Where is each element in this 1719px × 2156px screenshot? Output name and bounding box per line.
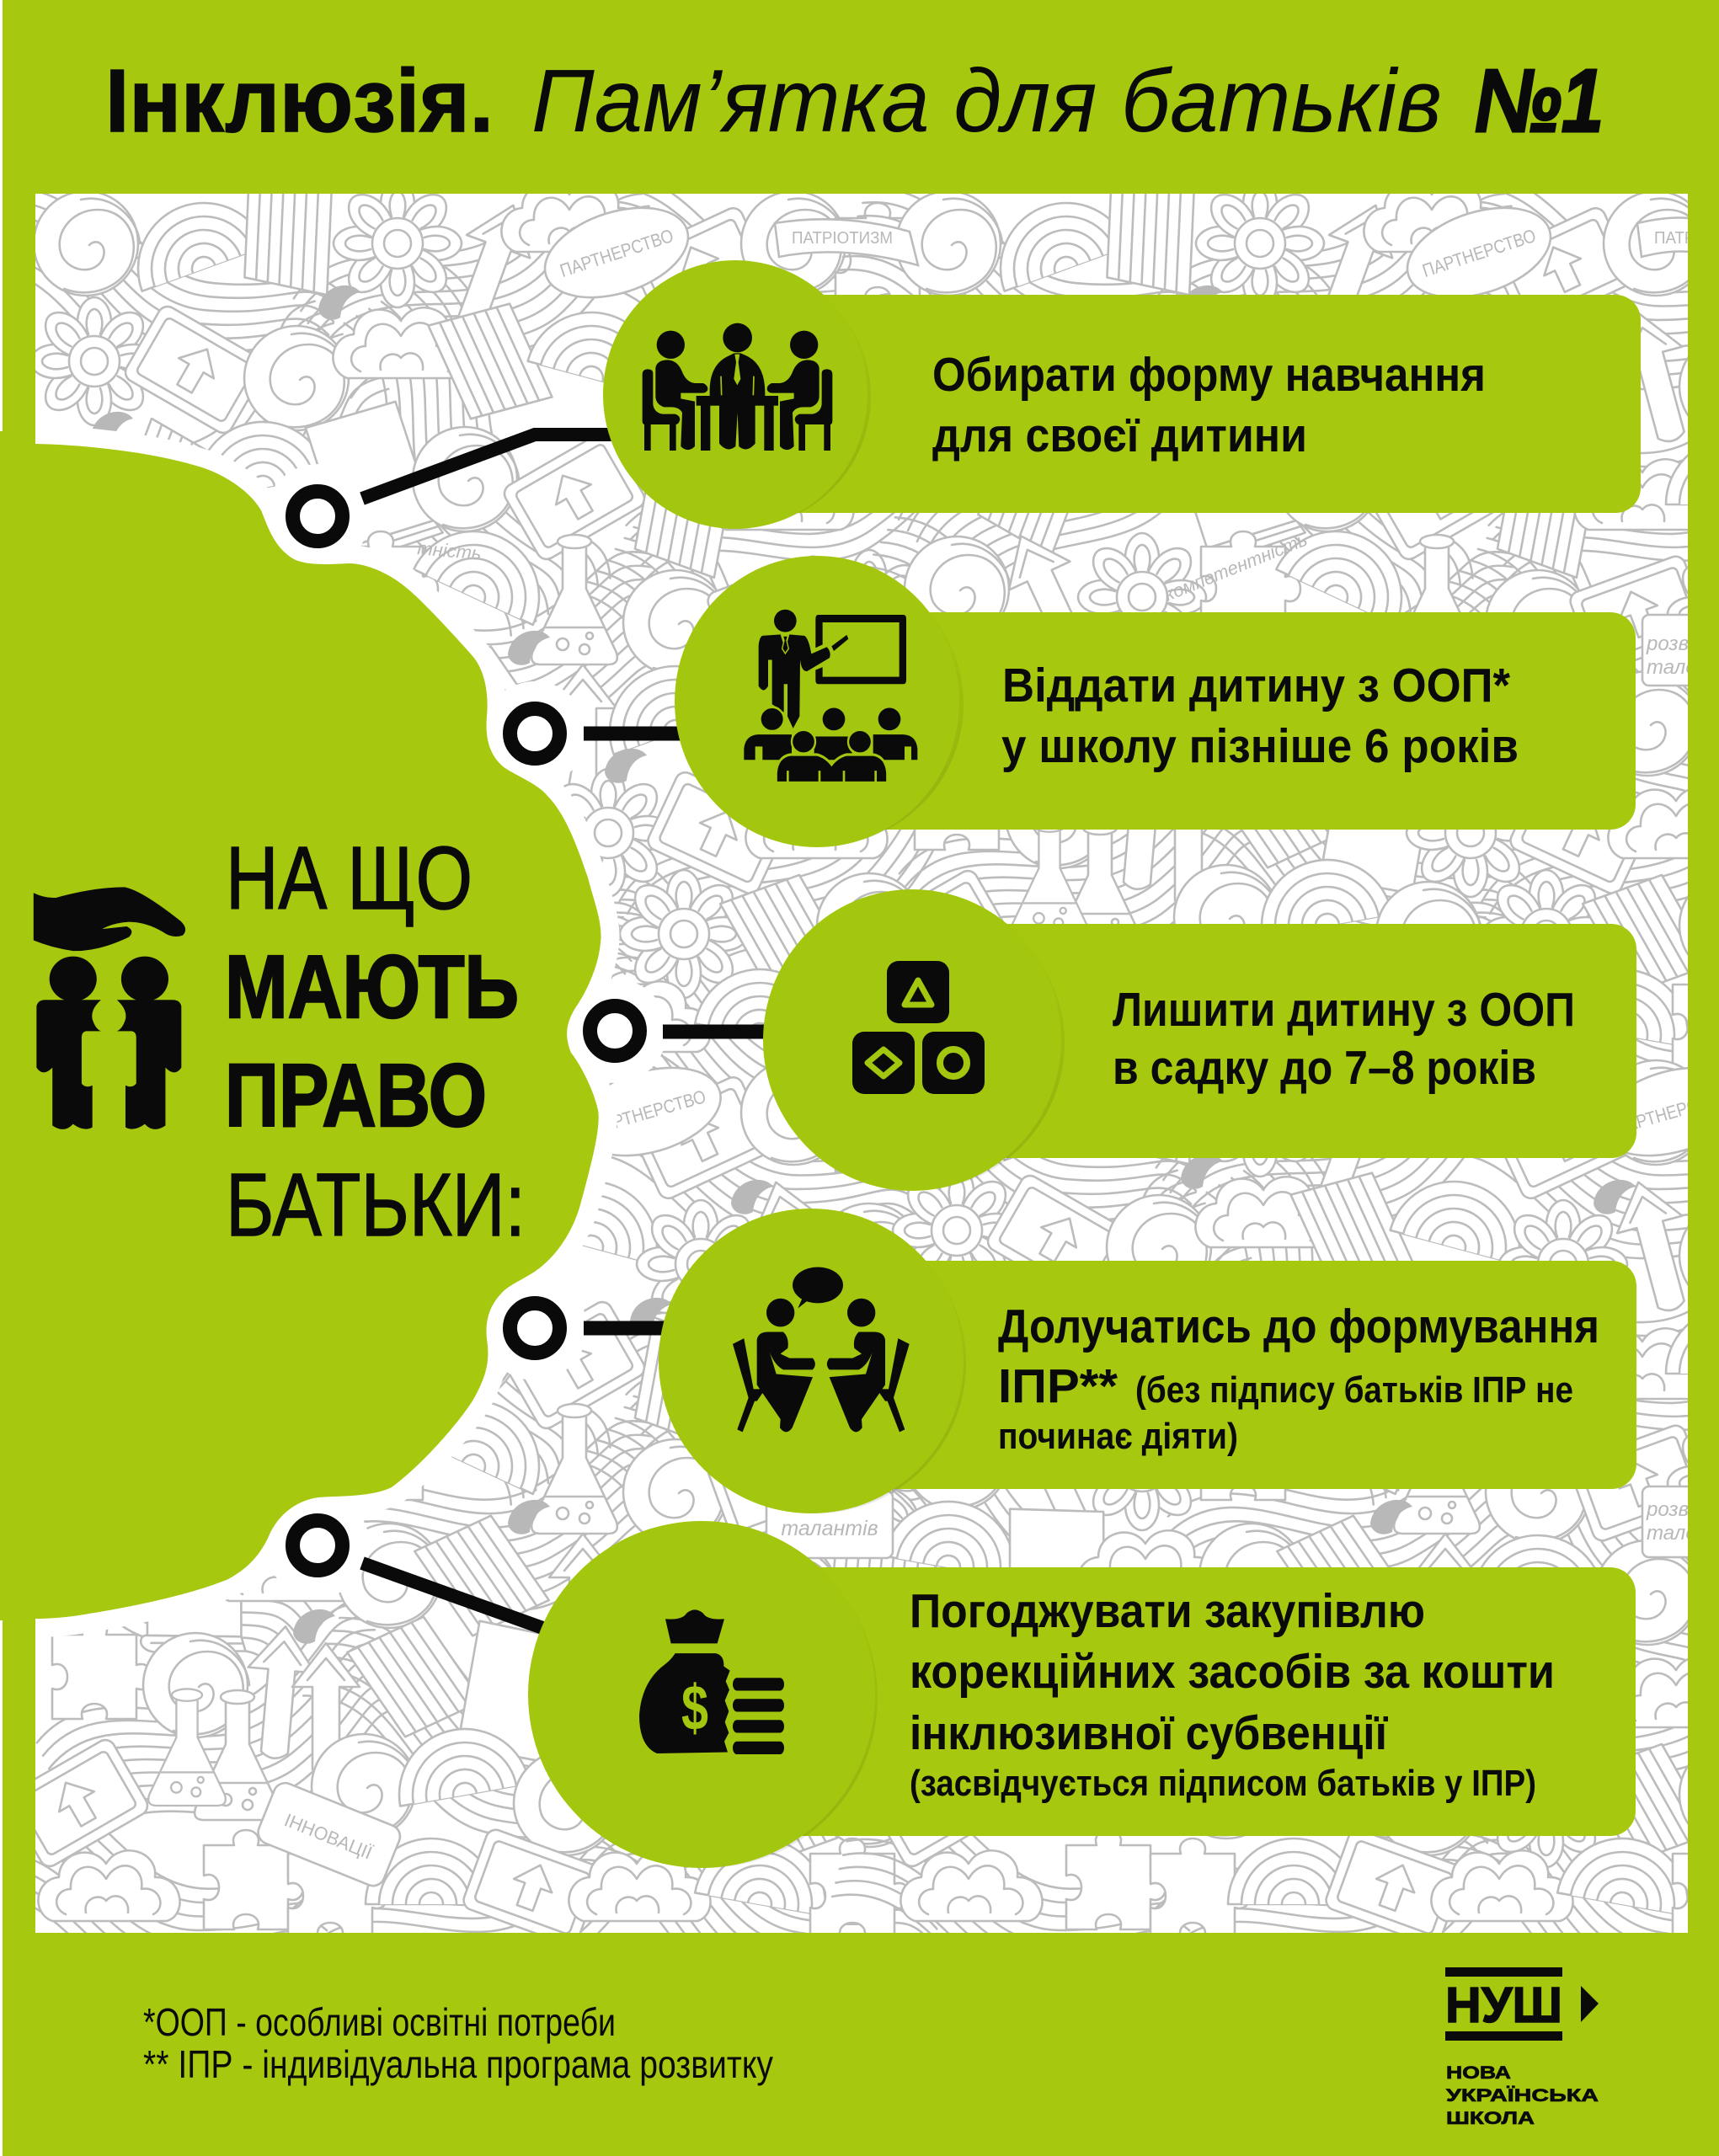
text: item 4: Долучатись до формування (998, 1299, 1599, 1353)
panel: doodle background (35, 194, 1688, 1933)
panel: doodle background: тало (1647, 656, 1697, 679)
text: item 1: для своєї дитини (932, 408, 1307, 462)
text: item 4 (998, 1299, 1599, 1457)
text: item 1: Обирати форму навчання (932, 348, 1486, 402)
text: item 3 (1113, 983, 1575, 1095)
text: item 5: Погоджувати закупівлю (910, 1584, 1425, 1638)
text: item 4: ІПР** (998, 1359, 1118, 1413)
logo: NUSH: УКРАЇНСЬКА (1446, 2086, 1599, 2105)
icon: money bag and coins (639, 1609, 784, 1754)
green blob (0, 444, 601, 1619)
panel: doodle background: ПАРТНЕРСТВО (558, 225, 676, 281)
footnotes: ** ІПР - індивідуальна програма розвитку (143, 2042, 773, 2086)
text: item 3: в садку до 7–8 років (1113, 1041, 1536, 1095)
text: item 5: корекційних засобів за кошти (910, 1645, 1555, 1699)
panel: right 1 (603, 260, 1641, 529)
footnotes: *ООП - особливі освітні потреби (143, 2000, 616, 2044)
text: item 5 (910, 1584, 1555, 1804)
panel: doodle background: ІННОВАЦІЇ (281, 1809, 376, 1864)
title: Пам’ятка для батьків (531, 51, 1442, 151)
panel: doodle background: тність (417, 537, 483, 564)
panel: doodle background: компетентність (1161, 529, 1311, 605)
logo: NUSH (1445, 1967, 1599, 2128)
panel: doodle background: ПАТРІОТИЗМ (792, 229, 893, 248)
text: item 2: Віддати дитину з ООП* (1002, 659, 1511, 712)
connector 1 (293, 435, 615, 541)
logo: NUSH: НУШ (1445, 1977, 1562, 2033)
icon: toy blocks (852, 961, 985, 1094)
text: item 4: починає діяти) (998, 1416, 1238, 1457)
text: item 5: (засвідчується підписом батьків у ІПР) (910, 1763, 1536, 1804)
panel: right 4 (659, 1209, 1636, 1513)
panel: doodle background: розв (1646, 632, 1689, 655)
heading: parents' rights: БАТЬКИ: (226, 1155, 526, 1255)
title (105, 51, 1604, 151)
heading: parents' rights: ПРАВО (225, 1046, 487, 1145)
text: item 4: (без підпису батьків ІПР не (1135, 1369, 1573, 1411)
icon: hand over two figures (34, 887, 185, 1129)
connector 4 (510, 1304, 674, 1353)
text: item 2: у школу пізніше 6 років (1001, 719, 1519, 773)
logo: NUSH: ШКОЛА (1446, 2109, 1535, 2128)
icon: teacher and class (744, 610, 917, 783)
panel: doodle background: ПАРТНЕРСТВО (589, 1086, 708, 1139)
icon: two people talking (733, 1267, 910, 1432)
text: item 1 (932, 348, 1486, 462)
title: Інклюзія. (105, 51, 494, 151)
heading: parents' rights: НА ЩО (226, 829, 472, 928)
text: item 3: Лишити дитину з ООП (1113, 983, 1575, 1037)
connector 3 (590, 1006, 771, 1056)
panel: doodle background: талантів (781, 1517, 878, 1540)
panel: doodle background: ПАРТНЕРСТВО (1420, 225, 1539, 281)
heading: parents' rights: МАЮТЬ (225, 937, 519, 1037)
panel: right 2 (675, 556, 1636, 847)
logo: NUSH: НОВА (1446, 2063, 1511, 2083)
panel: right 3 (763, 889, 1636, 1191)
panel: doodle background: тало (1647, 1522, 1697, 1545)
icon: meeting at table (643, 323, 832, 451)
panel: right 5 (528, 1521, 1636, 1868)
title: №1 (1475, 51, 1604, 151)
panel: doodle background: розв (1646, 1498, 1689, 1521)
connector 2 (510, 709, 686, 758)
heading: parents' rights (225, 829, 526, 1255)
text: dollar sign: $ (681, 1673, 708, 1744)
text: item 2 (1001, 659, 1519, 773)
footnotes (143, 2000, 773, 2086)
text: item 5: інклюзивної субвенції (910, 1706, 1389, 1760)
connector 5 (293, 1521, 547, 1630)
